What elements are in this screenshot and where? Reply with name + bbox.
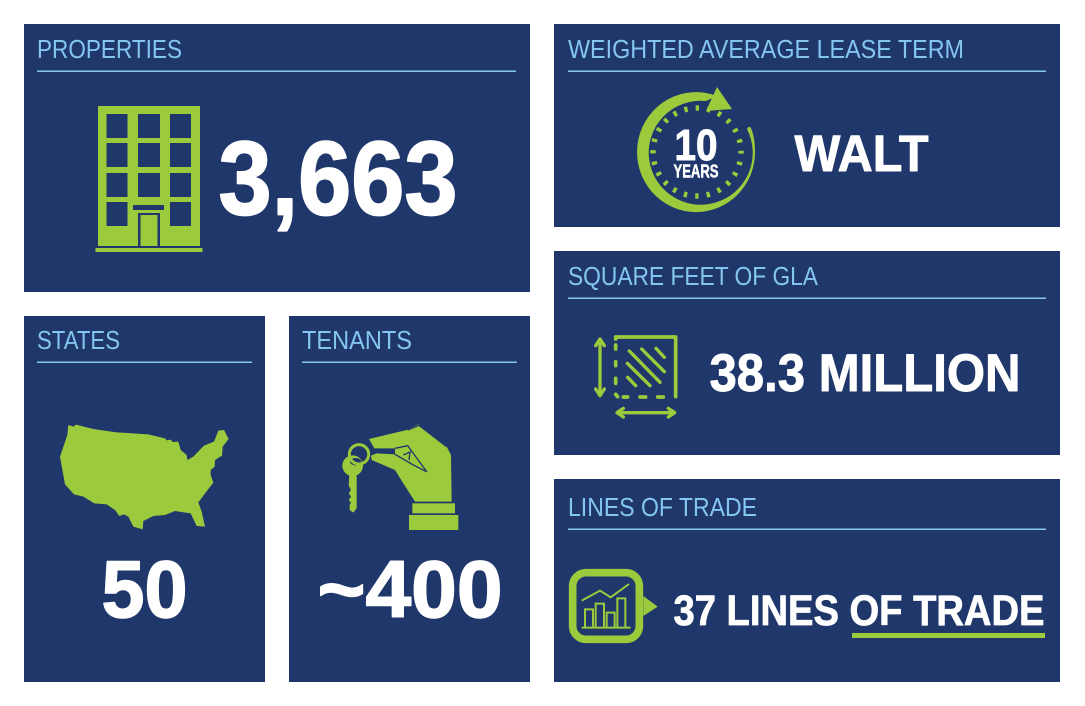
heading: tenants: TENANTS bbox=[302, 325, 412, 355]
icon: hand holding key bbox=[342, 424, 458, 530]
heading: states: STATES bbox=[37, 325, 120, 355]
icon: 10 year clock bbox=[637, 87, 755, 212]
text: walt: WALT bbox=[794, 125, 928, 182]
number: 50: 50 bbox=[102, 545, 188, 635]
number: ~400: ~400 bbox=[318, 545, 502, 635]
number: 38.3 million: 38.3 MILLION bbox=[710, 344, 1020, 403]
heading: lines of trade: LINES OF TRADE bbox=[568, 492, 757, 522]
panel: properties bbox=[24, 24, 530, 292]
text: 37 lines of trade: 37 LINES OF TRADE bbox=[674, 587, 1044, 635]
icon: USA map bbox=[60, 425, 229, 529]
heading: properties: PROPERTIES bbox=[37, 34, 182, 64]
icon: chart in speech bubble bbox=[573, 573, 658, 639]
panel: lines of trade bbox=[554, 479, 1060, 682]
panel: weighted average lease term bbox=[554, 24, 1060, 227]
number: 3,663: 3,663 bbox=[218, 120, 458, 238]
panel: square feet of gla bbox=[554, 251, 1060, 455]
panel: tenants bbox=[289, 316, 530, 682]
heading: gla: SQUARE FEET OF GLA bbox=[568, 261, 819, 291]
icon: building bbox=[96, 106, 202, 252]
icon: 10 year clock: YEARS bbox=[674, 162, 718, 182]
underline bbox=[852, 633, 1045, 638]
panel: states bbox=[24, 316, 265, 682]
icon: area measure bbox=[596, 337, 676, 417]
heading: walt: WEIGHTED AVERAGE LEASE TERM bbox=[568, 34, 964, 64]
icon: 10 year clock: 10 bbox=[674, 121, 718, 170]
